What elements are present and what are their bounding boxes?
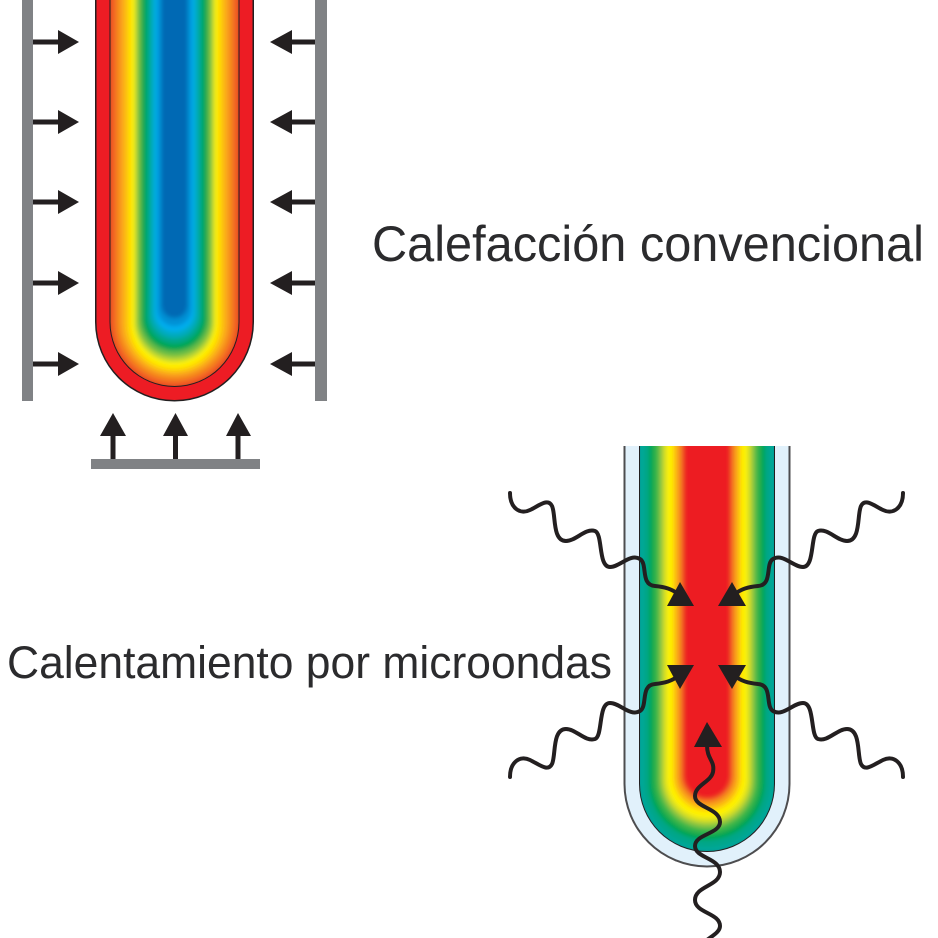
arrows from bottom plate bbox=[100, 413, 251, 459]
right heating wall bbox=[315, 0, 327, 401]
panel: microwave heating diagram bbox=[508, 446, 905, 938]
wave: lower left microwave bbox=[510, 676, 678, 777]
wave: lower right microwave bbox=[735, 676, 903, 777]
label: microwave heating: Calentamiento por microondas bbox=[7, 637, 612, 688]
arrows from right wall bbox=[270, 30, 315, 376]
label: conventional heating: Calefacción convencional bbox=[372, 216, 924, 272]
bottom heating plate bbox=[91, 459, 260, 469]
test tube with temperature gradient bbox=[624, 446, 790, 868]
left heating wall bbox=[22, 0, 33, 401]
arrowheads pointing to the tube centre bbox=[667, 582, 746, 747]
arrows from left wall bbox=[33, 30, 79, 376]
panel: conventional heating diagram bbox=[22, 0, 327, 469]
test tube with temperature gradient bbox=[95, 0, 254, 324]
wave: bottom microwave bbox=[695, 745, 720, 938]
wave: upper right microwave bbox=[735, 493, 903, 594]
wave: upper left microwave bbox=[510, 493, 678, 594]
